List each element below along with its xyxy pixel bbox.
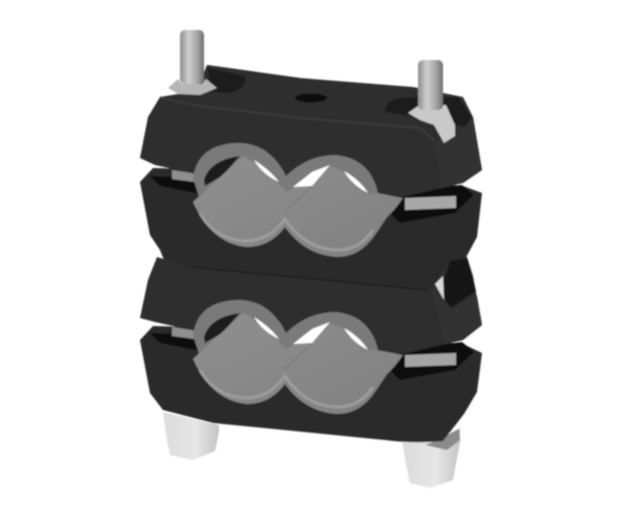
top nuts and threaded studs — [168, 30, 455, 143]
upper jaw, bottom pair — [140, 257, 482, 354]
bottom nuts — [163, 412, 460, 488]
right side face, bottom pair — [432, 289, 482, 344]
lower jaw, top pair — [140, 168, 482, 296]
top face highlight — [160, 97, 435, 141]
cable insert, top pair — [193, 143, 403, 257]
cable insert, bottom pair — [193, 300, 403, 414]
side opening, bottom pair — [435, 258, 476, 308]
upper jaw, top pair — [140, 65, 482, 197]
right side face, top pair — [435, 117, 482, 188]
joint line between pairs — [190, 267, 428, 290]
clamp recess and spacers, bottom pair — [150, 327, 474, 380]
clamp recess and spacers, top pair — [150, 170, 474, 223]
lower jaw, bottom pair — [140, 326, 482, 442]
bolt recesses and centre hole — [208, 68, 472, 127]
threaded studs — [207, 65, 300, 95]
